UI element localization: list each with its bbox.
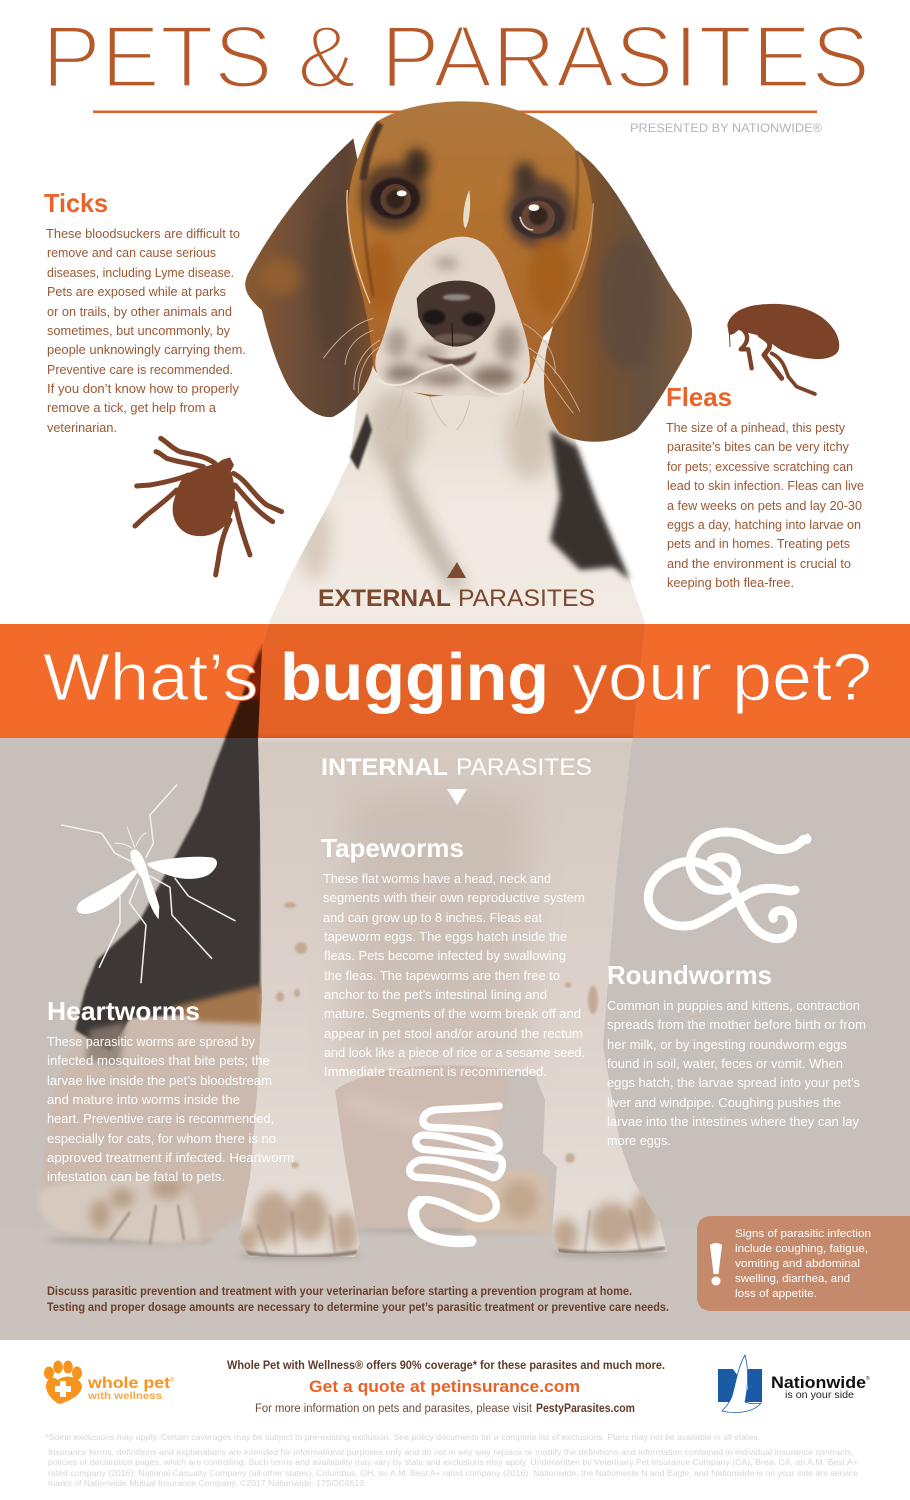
- roundworms text: larvae into the intestines where they can lay: [607, 1114, 859, 1129]
- floor: [0, 1228, 910, 1340]
- prevention note: [47, 1286, 669, 1314]
- headline: What’s: [43, 640, 258, 715]
- heartworms text: [47, 1034, 294, 1184]
- tapeworms text: Immediate treatment is recommended.: [324, 1064, 547, 1079]
- front paw shading: [237, 1191, 658, 1254]
- dog photo illustration: [38, 101, 692, 1260]
- roundworms text: found in soil, water, feces or vomit. When: [607, 1056, 843, 1071]
- external parasites label: EXTERNAL: [318, 585, 451, 612]
- muzzle: [375, 237, 530, 397]
- callout text: loss of appetite.: [735, 1288, 817, 1300]
- roundworms text: spreads from the mother before birth or from: [607, 1017, 866, 1032]
- fleas text: parasite’s bites can be very itchy: [667, 439, 849, 454]
- hind paw right: [462, 1169, 552, 1232]
- panel: heartworms: [47, 785, 294, 1184]
- heartworms text: infected mosquitoes that bite pets; the: [47, 1053, 270, 1068]
- ticks text: Pets are exposed while at parks: [47, 284, 226, 299]
- icon: mosquito: [62, 785, 235, 983]
- fleas text: a few weeks on pets and lay 20-30: [667, 498, 862, 513]
- callout text: include coughing, fatigue,: [735, 1243, 868, 1255]
- prevention note: Testing and proper dosage amounts are necessary to determine your pet’s parasitic treatment or preventive care needs.: [47, 1302, 669, 1314]
- dark back: [75, 645, 263, 1052]
- nose: [417, 281, 495, 347]
- haunch: [40, 645, 263, 1243]
- hind paw left: [38, 1175, 200, 1244]
- logo: whole pet with wellness: whole pet: [87, 1375, 170, 1392]
- headline: your pet?: [572, 640, 872, 715]
- heartworms text: infestation can be fatal to pets.: [47, 1169, 225, 1184]
- tapeworms text: These flat worms have a head, neck and: [323, 871, 551, 886]
- mouth: [427, 352, 477, 366]
- icon: tapeworm: [410, 1106, 502, 1242]
- panel: roundworms: [607, 832, 866, 1148]
- ticks text: people unknowingly carrying them.: [47, 342, 246, 357]
- fleas text: and the environment is crucial to: [667, 556, 851, 571]
- fine print: marks of Nationwide Mutual Insurance Company. ©2017 Nationwide. 17SOC4613: [48, 1479, 365, 1488]
- icon: exclamation mark: [710, 1243, 722, 1286]
- fleas text: The size of a pinhead, this pesty: [666, 420, 845, 435]
- ticks text: If you don’t know how to properly: [47, 381, 239, 396]
- ticks text: diseases, including Lyme disease.: [47, 265, 234, 280]
- fine print: policies or declaration pages, which are controlling. Such terms and availability may vary by state and exclusions may apply. Underwritten by Veterinary Pet Insurance Company (CA), Brea, CA, an A.M. Best A+: [48, 1458, 858, 1467]
- tapeworms heading: Tapeworms: [321, 833, 464, 863]
- panel: fleas: [666, 304, 864, 590]
- tapeworms text: [323, 871, 585, 1079]
- logo: whole pet with wellness: ®: [170, 1377, 175, 1384]
- fleas heading: Fleas: [666, 382, 732, 412]
- tapeworms text: appear in pet stool and/or around the rectum: [324, 1026, 583, 1041]
- callout: signs of infection: [697, 1216, 910, 1311]
- ticks text: Preventive care is recommended.: [47, 362, 233, 377]
- title rule: [93, 110, 817, 113]
- blaze: [463, 190, 470, 228]
- headline: [43, 640, 872, 715]
- fleas text: eggs a day, hatching into larvae on: [667, 517, 861, 532]
- internal parasites label: INTERNAL: [321, 754, 448, 781]
- presented by: PRESENTED BY NATIONWIDE®: [630, 123, 823, 135]
- heartworms text: larvae live inside the pet’s bloodstream: [47, 1073, 272, 1088]
- logo: nationwide: ®: [866, 1375, 870, 1382]
- muzzle speckles: [385, 258, 521, 387]
- tapeworms text: and look like a piece of rice or a sesame seed.: [324, 1045, 585, 1060]
- internal parasites label: PARASITES: [456, 754, 592, 781]
- fine print: rated company (2016); National Casualty Company (all other states), Columbus, OH, an A.M. Best A+ rated company (2016). Nationwide, the Nationwide N and Eagle, and Nationwide is on your side are service: [48, 1469, 859, 1478]
- ticks heading: Ticks: [44, 188, 108, 218]
- fleas text: for pets; excessive scratching can: [667, 459, 853, 474]
- roundworms text: more eggs.: [607, 1133, 671, 1148]
- footer panel: [0, 1340, 910, 1500]
- logo: nationwide: is on your side: [785, 1390, 854, 1401]
- roundworms text: liver and windpipe. Coughing pushes the: [607, 1095, 841, 1110]
- central chest tone: [342, 789, 530, 1070]
- tapeworms text: mature. Segments of the worm break off and: [324, 1006, 581, 1021]
- roundworms text: Common in puppies and kittens, contraction: [607, 998, 860, 1013]
- tapeworms text: and can grow up to 8 inches. Fleas eat: [323, 910, 542, 925]
- callout text: vomiting and abdominal: [735, 1258, 860, 1270]
- fine print: *Some exclusions may apply. Certain coverages may be subject to pre-existing exclusion. See policy documents for a complete list of exclusions. Plans may not be available in all states.: [45, 1433, 760, 1442]
- footer offer text: For more information on pets and parasites, please visit: [255, 1403, 533, 1415]
- panel: tapeworms: [321, 833, 585, 1242]
- ticks text: veterinarian.: [47, 420, 117, 435]
- chest shading: [299, 390, 554, 590]
- roundworms text: [607, 998, 866, 1148]
- dog head: [245, 101, 692, 442]
- heartworms text: approved treatment if infected. Heartworm: [47, 1150, 294, 1165]
- black shoulder patches: [550, 430, 630, 580]
- heartworms heading: Heartworms: [47, 996, 200, 1026]
- external parasites label: PARASITES: [458, 585, 595, 612]
- ticks text: or on trails, by other animals and: [47, 304, 232, 319]
- right eye: [512, 197, 565, 238]
- ticks text: [46, 226, 246, 435]
- tapeworms text: fleas. Pets become infected by swallowing: [324, 948, 566, 963]
- ticks text: sometimes, but uncommonly, by: [47, 323, 230, 338]
- grey panel background: [0, 738, 910, 1340]
- tapeworms text: segments with their own reproductive system: [323, 890, 585, 905]
- icon: roundworm: [648, 832, 809, 939]
- ticks text: These bloodsuckers are difficult to: [46, 226, 240, 241]
- roundworms heading: Roundworms: [607, 960, 772, 990]
- fine print: [45, 1433, 859, 1488]
- whiskers: [323, 318, 580, 440]
- face: [348, 101, 593, 397]
- orange headline band: [0, 624, 910, 738]
- footer offer text: PestyParasites.com: [536, 1403, 635, 1415]
- external parasites label: [318, 562, 595, 612]
- heartworms text: especially for cats, for whom there is no: [47, 1131, 276, 1146]
- callout text: Signs of parasitic infection: [735, 1228, 871, 1240]
- logo: whole pet with wellness: with wellness: [87, 1390, 162, 1402]
- roundworms text: her milk, or by ingesting roundworm eggs: [607, 1037, 847, 1052]
- floor shadow: [45, 1227, 668, 1260]
- ticks text: remove a tick, get help from a: [47, 400, 217, 415]
- logo: nationwide: Nationwide: [771, 1374, 866, 1392]
- internal parasites label: [321, 754, 592, 805]
- fine print: Insurance terms, definitions and explanations are intended for informational purposes only and do not in any way replace or modify the definitions and information contained in individual insurance contracts,: [48, 1448, 854, 1457]
- footer offer text: Get a quote at petinsurance.com: [309, 1377, 580, 1396]
- fleas text: [666, 420, 864, 590]
- tapeworms text: the fleas. The tapeworms are then free to: [324, 968, 560, 983]
- right ear: [544, 150, 692, 442]
- fleas text: keeping both flea-free.: [667, 575, 794, 590]
- headline: bugging: [280, 640, 549, 715]
- fleas text: pets and in homes. Treating pets: [667, 536, 850, 551]
- title: PETS & PARASITES: [42, 7, 870, 106]
- panel: ticks: [44, 188, 282, 575]
- heartworms text: and mature into worms inside the: [47, 1092, 240, 1107]
- ticks text: remove and can cause serious: [47, 245, 216, 260]
- roundworms text: eggs hatch, the larvae spread into your pet’s: [607, 1075, 860, 1090]
- tapeworms text: tapeworm eggs. The eggs hatch inside the: [324, 929, 567, 944]
- tan flank patch: [170, 985, 262, 1024]
- belly: [335, 1060, 507, 1228]
- footer offer text: Whole Pet with Wellness® offers 90% coverage* for these parasites and much more.: [227, 1360, 665, 1372]
- fleas text: lead to skin infection. Fleas can live: [667, 478, 864, 493]
- callout text: [735, 1228, 871, 1300]
- left eye: [370, 178, 420, 219]
- footer offer text: [227, 1360, 665, 1415]
- leg spots: [276, 902, 598, 1168]
- prevention note: Discuss parasitic prevention and treatment with your veterinarian before starting a prevention program at home.: [47, 1286, 632, 1298]
- icon: tick: [135, 438, 282, 575]
- heartworms text: heart. Preventive care is recommended,: [47, 1111, 274, 1126]
- logo: whole pet with wellness: [44, 1360, 175, 1404]
- callout text: swelling, diarrhea, and: [735, 1273, 850, 1285]
- logo: nationwide: [718, 1355, 870, 1413]
- icon: flea: [727, 304, 839, 394]
- heartworms text: These parasitic worms are spread by: [47, 1034, 255, 1049]
- torso and front legs: [238, 340, 667, 1257]
- tapeworms text: anchor to the pet’s intestinal lining and: [324, 987, 547, 1002]
- left ear: [245, 138, 377, 417]
